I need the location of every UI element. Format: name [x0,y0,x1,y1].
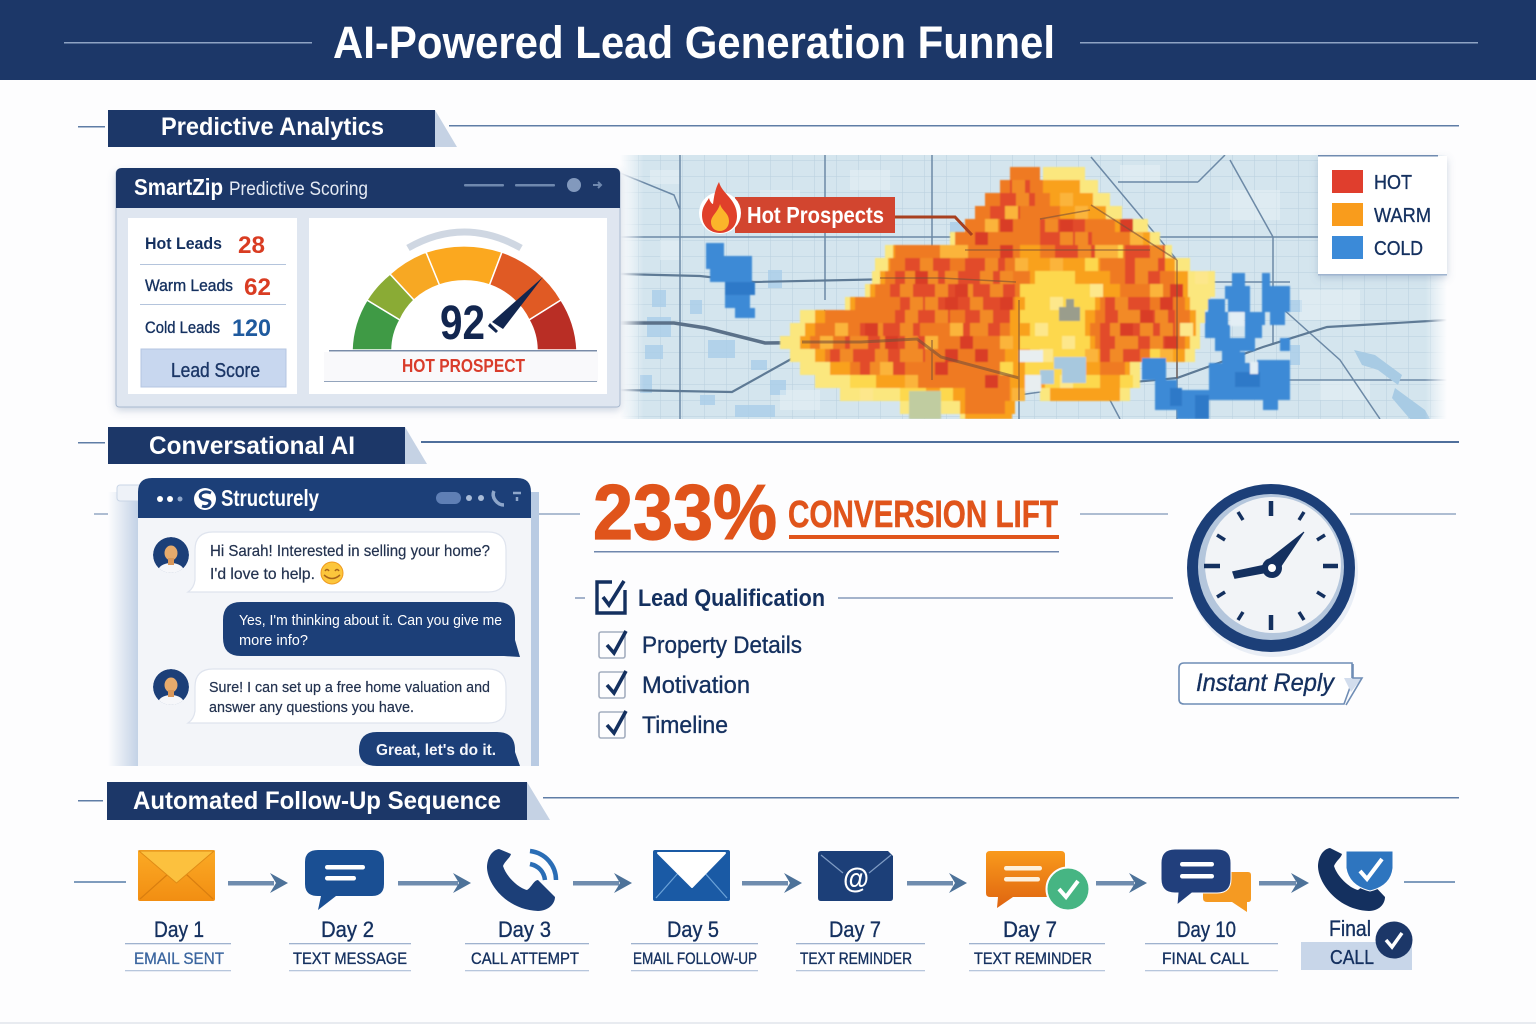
step: Day 7 text reminder [796,851,925,971]
arrow [907,873,967,893]
section heading: Automated Follow-Up Sequence: Automated Follow-Up Sequence [133,787,501,815]
item: motivation [599,671,750,699]
stat: 233% conversion lift [593,468,1059,556]
map legend: COLD [1374,238,1423,260]
lead score gauge: 92 [440,297,485,350]
message: bot greeting: I'd love to help. [210,566,315,583]
checklist: lead qualification: Lead Qualification [638,585,825,612]
section heading: Conversational AI [78,427,1459,464]
step: Day 2 text message: TEXT MESSAGE [293,949,407,968]
message: bot greeting: Hi Sarah! Interested in selling your home? [210,543,490,560]
message: user reply [223,602,520,657]
icon: blue chat bubble [305,850,384,910]
lead counts [128,218,297,394]
arrow [742,873,802,893]
step: Day 5 email follow-up: EMAIL FOLLOW-UP [633,949,757,968]
avatar: agent 2 [153,669,189,705]
icon: blue envelope [653,850,730,901]
step: Day 10 final call [1145,849,1278,971]
arrow [398,873,471,893]
message: user confirms: Great, let's do it. [376,742,496,759]
lead counts: 62 [244,274,271,301]
label: Instant Reply: Instant Reply [1196,669,1335,697]
item: motivation: Motivation [642,672,750,699]
icon: double chat bubbles [1161,849,1251,912]
item: timeline [599,711,728,739]
panel: Structurely chat window [108,478,539,770]
step: Day 1 email sent: Day 1 [154,917,204,942]
message: bot greeting [188,532,506,592]
step: Day 1 email sent [125,850,231,971]
step: Day 3 call attempt: Day 3 [498,917,551,942]
icon: ringing phone [487,849,556,911]
gray and pale patches [1059,299,1080,321]
orange cells [800,180,1196,419]
roads over heat [802,205,1177,400]
step: final call [1301,848,1412,970]
message: bot offer [188,669,506,723]
message: user reply: Yes, I'm thinking about it. Can you give me [239,612,502,629]
header band with title: AI-Powered Lead Generation Funnel [333,17,1055,68]
lead counts: 120 [232,315,271,342]
icon: smile emoji [321,562,343,584]
message: user reply: more info? [239,632,308,649]
step: Day 10 final call: FINAL CALL [1162,949,1249,968]
lead counts: 28 [238,232,265,259]
step: Day 7 text reminder with check: TEXT REMINDER [974,949,1092,968]
mixed cells for pixel texture [840,180,1173,375]
stat: 233% conversion lift: CONVERSION LIFT [788,494,1058,536]
panel: SmartZip predictive scoring: SmartZip [134,174,223,200]
icon: check badge [1376,922,1412,958]
step: final call: Final [1329,916,1371,941]
map legend: HOT [1374,172,1412,194]
step: Day 3 call attempt [465,849,589,971]
arrow [573,873,632,893]
light blue map blocks [640,205,1302,417]
chat header [157,488,521,511]
label: Instant Reply [1179,663,1362,705]
mid yellow cells [850,245,1163,401]
step: final call: CALL [1330,947,1374,969]
section heading: Conversational AI: Conversational AI [149,432,355,460]
icon: clock [1187,484,1358,657]
lead counts: Hot Leads [145,235,222,253]
section heading: Predictive Analytics [78,110,1459,147]
panel: SmartZip predictive scoring: Predictive Scoring [229,179,368,200]
message: user confirms [359,732,520,766]
message: bot offer: Sure! I can set up a free home valuation and [209,679,490,696]
message: bot offer: answer any questions you have. [209,699,414,716]
map legend: WARM [1374,205,1431,227]
chat header: Structurely [221,485,319,511]
step: Day 5 email follow-up [631,850,758,971]
step: Day 2 text message: Day 2 [321,917,374,942]
heat cells [706,167,1290,419]
item: property details: Property Details [642,632,802,659]
section heading: Automated Follow-Up Sequence [78,782,1459,820]
heat map of prospects [620,155,1447,419]
panel: SmartZip predictive scoring [116,168,620,407]
checklist: lead qualification [597,581,825,739]
step: Day 7 text reminder with check [969,851,1105,971]
icon: phone with shield check [1318,848,1393,911]
map callout: Hot Prospects [699,182,972,235]
step: Day 3 call attempt: CALL ATTEMPT [471,949,579,968]
map legend [1318,155,1447,276]
map callout: Hot Prospects: Hot Prospects [747,202,884,228]
lead counts: Warm Leads [145,277,233,295]
stat: 233% conversion lift: 233% [593,468,777,556]
step: Day 7 text reminder: Day 7 [829,917,881,942]
lead counts: Cold Leads [145,319,220,337]
avatar: agent 1 [153,537,189,573]
step: Day 10 final call: Day 10 [1177,917,1236,942]
road network [620,155,1447,419]
lake [1354,350,1430,419]
section heading: Predictive Analytics: Predictive Analytics [161,113,384,141]
pale yellow halo [780,167,1215,419]
icon: orange chat with green check [986,851,1090,910]
lead counts: Lead Score [171,360,260,382]
deep orange cells [810,167,1190,414]
icon: flame [699,182,741,234]
arrow [1259,873,1309,893]
side connector lines for chat [94,513,580,515]
step: Day 7 text reminder: TEXT REMINDER [800,949,912,968]
icon: main checkbox [597,581,625,613]
lead score gauge: HOT PROSPECT [402,356,525,376]
icon: orange envelope [138,850,215,901]
step: Day 7 text reminder with check: Day 7 [1003,917,1057,942]
red cells [830,180,1175,375]
step: Day 2 text message [289,850,411,971]
right edge fade [1425,155,1447,419]
step: Day 1 email sent: EMAIL SENT [134,949,224,968]
icon: at-sign envelope: @ [843,863,869,895]
arrow [1096,873,1147,893]
blue cold cells [706,243,1290,419]
step: Day 5 email follow-up: Day 5 [667,917,719,942]
arrow [228,873,288,893]
lead score gauge [309,218,607,394]
item: timeline: Timeline [642,712,728,739]
header band with title [0,0,1536,80]
